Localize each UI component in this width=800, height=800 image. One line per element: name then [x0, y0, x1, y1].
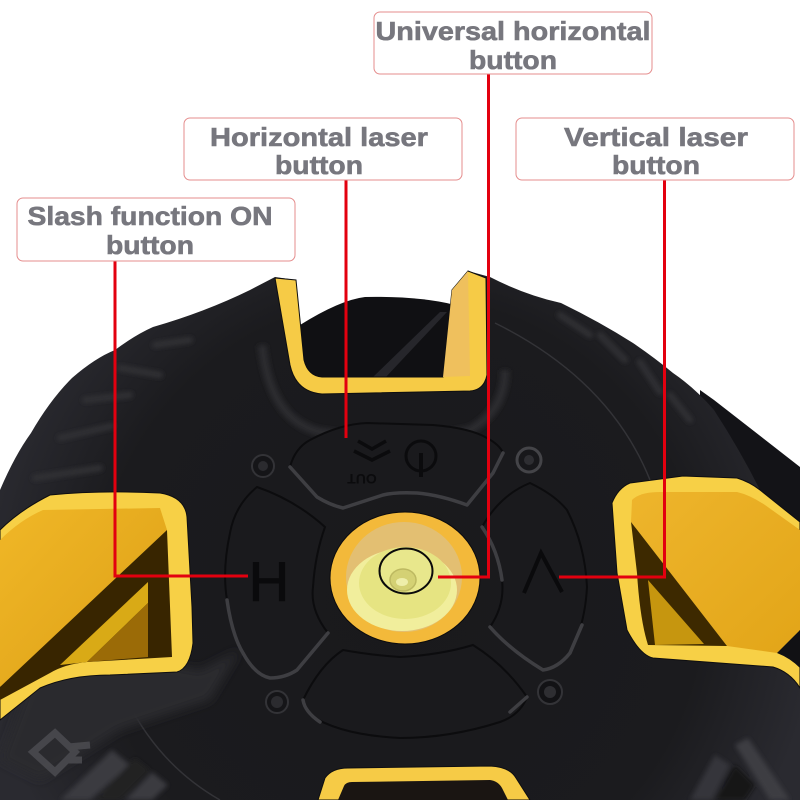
bottom right grip [690, 738, 790, 800]
right window yellow facet [648, 580, 704, 645]
right yellow window [612, 476, 800, 688]
callout: slash function on button: button [106, 230, 194, 260]
top button lower edge [290, 453, 503, 508]
bottom left grip [60, 750, 168, 800]
left window yellow stripe [60, 582, 148, 665]
callout: universal horizontal button: Universal horizontal [376, 16, 650, 46]
leader: horizontal laser [344, 180, 348, 438]
main body [0, 271, 800, 800]
right window dark corner [777, 630, 800, 668]
leader: universal horizontal [438, 74, 488, 577]
left yellow window [0, 492, 193, 720]
back housing stripe [372, 312, 447, 378]
device: laser level top view [0, 271, 800, 800]
callout: universal horizontal button [374, 12, 652, 75]
callout: slash function on button [17, 198, 295, 261]
bottom button [303, 645, 527, 738]
callout: vertical laser button: button [612, 150, 700, 180]
callout: vertical laser button: Vertical laser [564, 122, 748, 152]
callout: horizontal laser button: button [275, 150, 363, 180]
left button H [225, 487, 328, 678]
right button edge [482, 527, 582, 670]
left button edge [227, 600, 328, 678]
callout: horizontal laser button: Horizontal laser [210, 122, 428, 152]
bottom button edge [303, 697, 527, 722]
yellow notch [275, 271, 487, 394]
right button V [482, 483, 587, 670]
yellow notch rim [275, 271, 487, 394]
left shoulder sheen [0, 650, 240, 780]
lower dial arc [118, 680, 220, 800]
top button [290, 423, 503, 508]
yellow notch inner wall [443, 271, 470, 377]
body grip ridges [35, 315, 690, 478]
watermark logo [33, 733, 90, 772]
raised ring around notch [262, 345, 505, 438]
right side housing [700, 390, 800, 700]
left window rim [0, 492, 193, 720]
callout: universal horizontal button: button [469, 45, 557, 75]
device back housing [300, 297, 455, 380]
screws [252, 448, 562, 713]
callout: slash function on button: Slash function ON [28, 201, 272, 231]
left window panel [0, 508, 167, 687]
right window opening [631, 522, 727, 646]
leader: vertical laser [559, 180, 664, 577]
right window rim [612, 476, 800, 688]
callout: vertical laser button [516, 118, 794, 180]
right window panel [631, 492, 800, 653]
bubble level [330, 512, 480, 644]
OUT label: OUT [347, 471, 377, 487]
power icon [406, 441, 436, 477]
bottom yellow notch [318, 766, 530, 800]
callout: horizontal laser button [184, 118, 462, 180]
leader: slash function [115, 261, 248, 576]
left window amber facet [87, 603, 148, 662]
letter H: H [249, 550, 289, 613]
chevrons icon [354, 441, 390, 460]
inverted V mark [524, 553, 562, 593]
dial outline arc [495, 323, 650, 480]
left window opening [0, 530, 172, 700]
